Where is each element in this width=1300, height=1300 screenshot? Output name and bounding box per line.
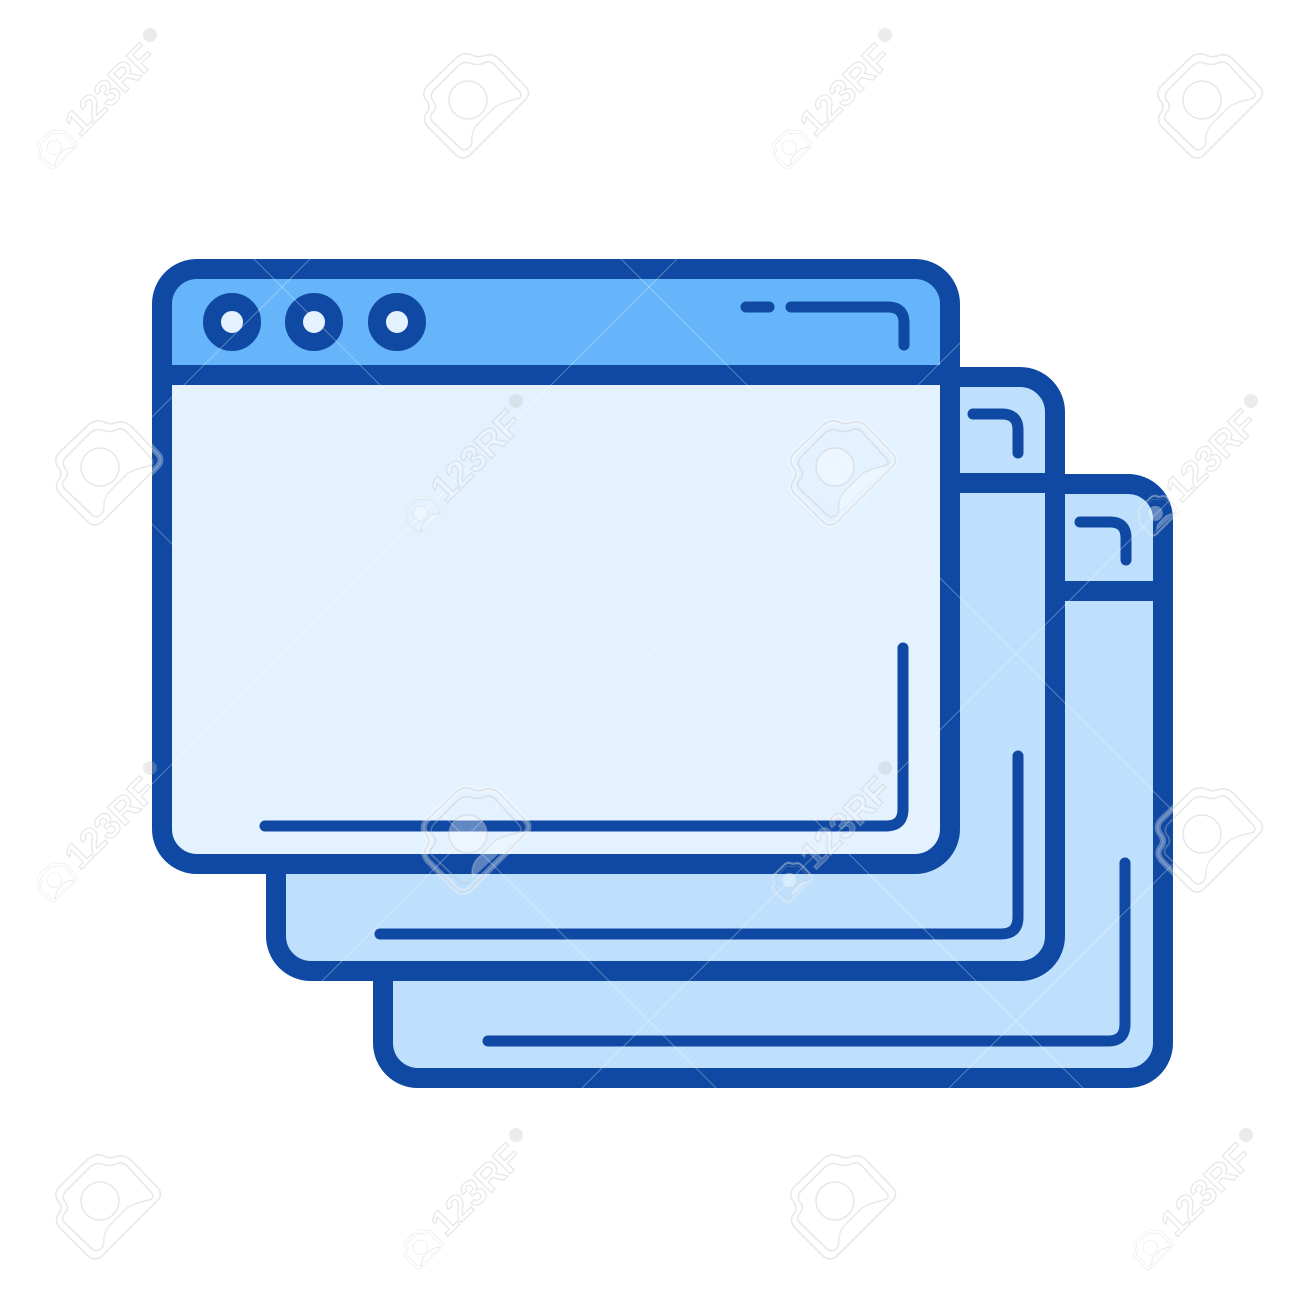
watermark 2 xyxy=(773,28,899,169)
watermark 6 xyxy=(773,761,899,902)
watermark 1: 123RF xyxy=(57,36,164,144)
watermark 5 xyxy=(38,761,164,902)
title bar xyxy=(162,269,950,375)
watermark 6: 123RF xyxy=(792,769,899,877)
watermark 4: 123RF xyxy=(1158,402,1265,510)
front window xyxy=(162,269,950,864)
watermark 7 xyxy=(404,1128,530,1269)
title bar highlight xyxy=(746,307,904,345)
watermark 5: 123RF xyxy=(57,769,164,877)
body highlight xyxy=(265,648,903,826)
middle window xyxy=(276,377,1055,971)
watermark 8 xyxy=(1134,1128,1260,1269)
window control dots xyxy=(212,302,417,342)
watermark 4 xyxy=(1139,394,1265,535)
watermark 8: 123RF xyxy=(1153,1136,1260,1244)
watermark 3 xyxy=(404,394,530,535)
window body xyxy=(162,269,950,864)
watermark 7: 123RF xyxy=(423,1136,530,1244)
watermark 1 xyxy=(38,28,164,169)
window outline xyxy=(162,269,950,864)
watermark 3: 123RF xyxy=(423,402,530,510)
watermark 2: 123RF xyxy=(792,36,899,144)
back window xyxy=(383,484,1163,1078)
